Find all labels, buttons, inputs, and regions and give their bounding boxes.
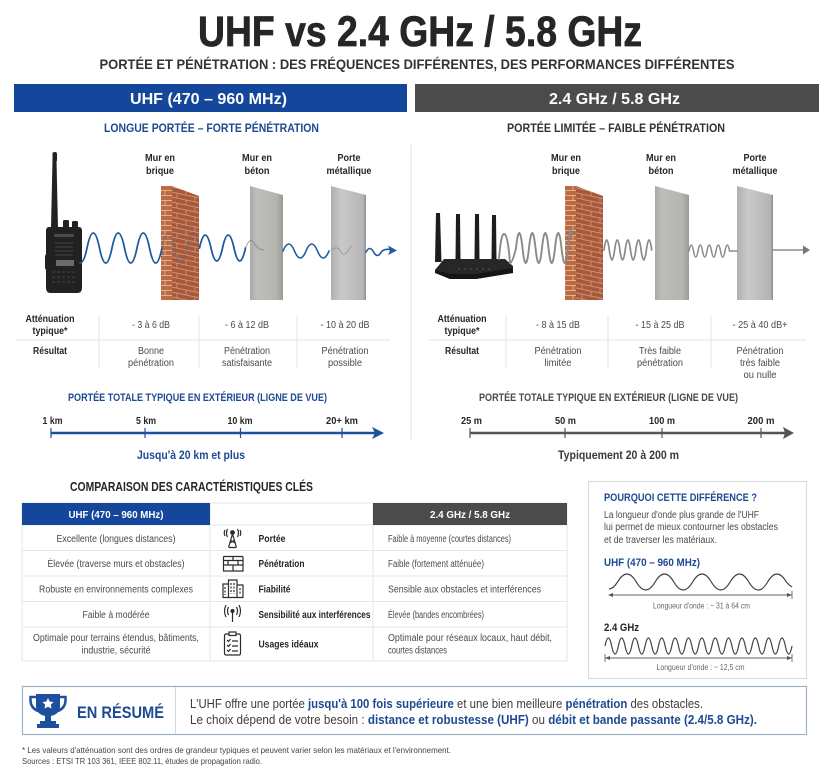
wall labels: Porte xyxy=(744,153,767,164)
wall: metal door xyxy=(737,186,773,300)
column: GHz values: Optimale pour réseaux locaux, haut débit, xyxy=(388,633,552,644)
wall labels: brique xyxy=(552,166,580,177)
icon: trophy xyxy=(30,694,66,728)
wave: GHz signal xyxy=(499,229,810,263)
icon: buildings xyxy=(222,580,244,598)
summary text: L'UHF offre une portée jusqu'à 100 fois supérieure et une bien meilleure pénétration des obstacles. xyxy=(190,696,703,711)
GHz range caption: Typiquement 20 à 200 m xyxy=(558,448,679,462)
summary text: Le choix dépend de votre besoin : distance et robustesse (UHF) ou débit et bande passante (2.4/5.8 GHz). xyxy=(190,712,757,727)
UHF subheading: LONGUE PORTÉE – FORTE PÉNÉTRATION xyxy=(104,120,319,135)
wall labels: Mur en xyxy=(242,153,272,164)
why heading: POURQUOI CETTE DIFFÉRENCE ? xyxy=(604,491,757,504)
column: GHz values: Sensible aux obstacles et interférences xyxy=(388,584,541,596)
GHz attenuation table: limitée xyxy=(544,358,572,369)
GHz header bar xyxy=(415,84,819,112)
panel: summary xyxy=(22,686,806,734)
column: GHz values: courtes distances xyxy=(388,646,447,656)
column: UHF values: Élevée (traverse murs et obstacles) xyxy=(48,557,184,570)
why explanation: et de traverser les matériaux. xyxy=(604,535,717,546)
wave: UHF signal xyxy=(80,233,397,263)
wall labels: métallique xyxy=(732,166,778,177)
icon: handheld radio xyxy=(45,152,82,293)
icon: wifi router xyxy=(435,213,513,279)
column: criteria labels: Pénétration xyxy=(258,559,304,570)
comparison table xyxy=(22,503,567,661)
column: GHz values xyxy=(388,534,552,656)
GHz range heading: PORTÉE TOTALE TYPIQUE EN EXTÉRIEUR (LIGNE DE VUE) xyxy=(479,391,738,404)
UHF header bar xyxy=(14,84,407,112)
wall: brick xyxy=(161,186,199,300)
column: GHz values: Élevée (bandes encombrées) xyxy=(388,608,484,621)
UHF range caption: Jusqu'à 20 km et plus xyxy=(137,448,245,462)
wall labels: béton xyxy=(244,166,270,177)
wall labels: métallique xyxy=(326,166,372,177)
column: criteria labels: Portée xyxy=(258,534,286,545)
UHF wavelength diagram xyxy=(608,574,792,610)
column: criteria labels: Usages idéaux xyxy=(258,640,319,650)
central divider xyxy=(410,145,412,439)
GHz attenuation table: très faible xyxy=(740,358,780,369)
column: UHF values xyxy=(33,534,199,656)
UHF wavelength diagram: Longueur d'onde : ~ 31 à 64 cm xyxy=(653,602,750,610)
UHF range axis: 10 km xyxy=(228,416,253,427)
GHz attenuation table: Résultat xyxy=(445,346,480,357)
column: GHz values: Faible à moyenne (courtes distances) xyxy=(388,534,511,545)
column: criteria labels xyxy=(258,534,371,650)
why explanation: La longueur d'onde plus grande de l'UHF xyxy=(604,510,759,521)
column: UHF values: Robuste en environnements complexes xyxy=(39,584,193,596)
footnote xyxy=(22,745,451,766)
wall: metal door xyxy=(331,186,366,300)
GHz attenuation table xyxy=(428,314,806,381)
column: criteria labels: Fiabilité xyxy=(258,584,291,596)
icon: signal waves xyxy=(224,605,240,622)
2.4 GHz wavelength diagram: Longueur d'onde : ~ 12,5 cm xyxy=(656,663,745,672)
GHz subheading: PORTÉE LIMITÉE – FAIBLE PÉNÉTRATION xyxy=(507,120,725,135)
summary text xyxy=(190,696,757,727)
GHz range axis: 25 m xyxy=(461,416,482,427)
column: UHF values: Excellente (longues distances) xyxy=(56,534,176,545)
column: UHF values: industrie, sécurité xyxy=(82,646,151,656)
GHz range axis: 50 m xyxy=(555,416,576,427)
column: UHF values: Optimale pour terrains étendus, bâtiments, xyxy=(33,633,199,644)
wall labels: Porte xyxy=(338,153,361,164)
table header: GHz: 2.4 GHz / 5.8 GHz xyxy=(430,509,510,521)
footnote: * Les valeurs d'atténuation sont des ordres de grandeur typiques et peuvent varier selon les matériaux et l'environnement. xyxy=(22,745,451,755)
panel: why the difference xyxy=(588,482,806,678)
summary label: EN RÉSUMÉ xyxy=(77,703,164,722)
UHF attenuation table: typique* xyxy=(32,326,68,337)
table header: UHF: UHF (470 – 960 MHz) xyxy=(68,509,164,521)
UHF range heading: PORTÉE TOTALE TYPIQUE EN EXTÉRIEUR (LIGNE DE VUE) xyxy=(68,391,327,404)
wall labels: Mur en xyxy=(551,153,581,164)
wall labels xyxy=(145,153,372,177)
table header: UHF xyxy=(22,503,210,525)
column: criteria labels: Sensibilité aux interférences xyxy=(258,610,371,621)
GHz attenuation table: Pénétration xyxy=(736,346,784,357)
icon: brick wall xyxy=(224,556,243,571)
GHz attenuation table: Atténuation xyxy=(438,314,486,325)
UHF range axis: 20+ km xyxy=(326,416,358,427)
UHF attenuation table: - 3 à 6 dB xyxy=(132,320,170,331)
UHF range axis xyxy=(42,416,384,439)
GHz attenuation table: pénétration xyxy=(637,358,683,369)
wall labels: Mur en xyxy=(646,153,676,164)
wall labels: béton xyxy=(648,166,674,177)
footnote: Sources : ETSI TR 103 361, IEEE 802.11, études de propagation radio. xyxy=(22,756,262,766)
UHF header bar: UHF (470 – 960 MHz) xyxy=(130,91,287,108)
2.4 GHz wave label: 2.4 GHz xyxy=(604,622,639,634)
icon: clipboard checklist xyxy=(224,632,240,655)
GHz header bar: 2.4 GHz / 5.8 GHz xyxy=(549,91,680,108)
UHF wave label: UHF (470 – 960 MHz) xyxy=(604,557,700,569)
GHz attenuation table: typique* xyxy=(444,326,480,337)
wall: brick xyxy=(565,186,603,300)
GHz attenuation table: ou nulle xyxy=(744,370,777,381)
column: GHz values: Faible (fortement atténuée) xyxy=(388,559,484,570)
UHF attenuation table: Bonne xyxy=(138,346,164,357)
GHz attenuation table: Très faible xyxy=(639,346,681,357)
wall: concrete xyxy=(250,186,283,300)
UHF attenuation table: - 6 à 12 dB xyxy=(225,320,269,331)
panel: 2.4 / 5.8 GHz propagation xyxy=(415,84,819,462)
title: UHF vs 2.4 GHz / 5.8 GHz xyxy=(198,8,642,56)
UHF attenuation table xyxy=(15,314,390,369)
why explanation: lui permet de mieux contourner les obstacles xyxy=(604,522,778,533)
UHF attenuation table: Atténuation xyxy=(26,314,74,325)
UHF attenuation table: - 10 à 20 dB xyxy=(320,320,370,331)
UHF attenuation table: Pénétration xyxy=(224,346,270,357)
GHz attenuation table: - 25 à 40 dB+ xyxy=(732,320,788,331)
GHz range axis: 100 m xyxy=(649,416,675,427)
icon: antenna tower xyxy=(224,529,241,548)
wall labels: Mur en xyxy=(145,153,175,164)
table header: GHz xyxy=(373,503,567,525)
UHF attenuation table: pénétration xyxy=(128,358,174,369)
column: UHF values: Faible à modérée xyxy=(82,610,150,621)
UHF range axis: 1 km xyxy=(42,416,63,427)
UHF range axis: 5 km xyxy=(136,416,156,427)
subtitle: PORTÉE ET PÉNÉTRATION : DES FRÉQUENCES DIFFÉRENTES, DES PERFORMANCES DIFFÉRENTES xyxy=(100,56,734,72)
GHz attenuation table: - 15 à 25 dB xyxy=(636,320,685,331)
wall: concrete xyxy=(655,186,689,300)
GHz attenuation table: - 8 à 15 dB xyxy=(536,320,580,331)
GHz attenuation table: Pénétration xyxy=(534,346,582,357)
UHF attenuation table: possible xyxy=(328,358,362,369)
UHF attenuation table: Résultat xyxy=(33,346,68,357)
UHF attenuation table: satisfaisante xyxy=(222,358,272,369)
GHz range axis: 200 m xyxy=(748,416,775,427)
wall labels: brique xyxy=(146,166,174,177)
GHz range axis xyxy=(461,416,794,439)
panel: UHF propagation xyxy=(14,84,407,462)
2.4 GHz wavelength diagram xyxy=(605,638,792,672)
UHF attenuation table: Pénétration xyxy=(322,346,368,357)
comparison heading: COMPARAISON DES CARACTÉRISTIQUES CLÉS xyxy=(70,479,313,494)
wall labels xyxy=(551,153,778,177)
why explanation xyxy=(604,510,778,546)
